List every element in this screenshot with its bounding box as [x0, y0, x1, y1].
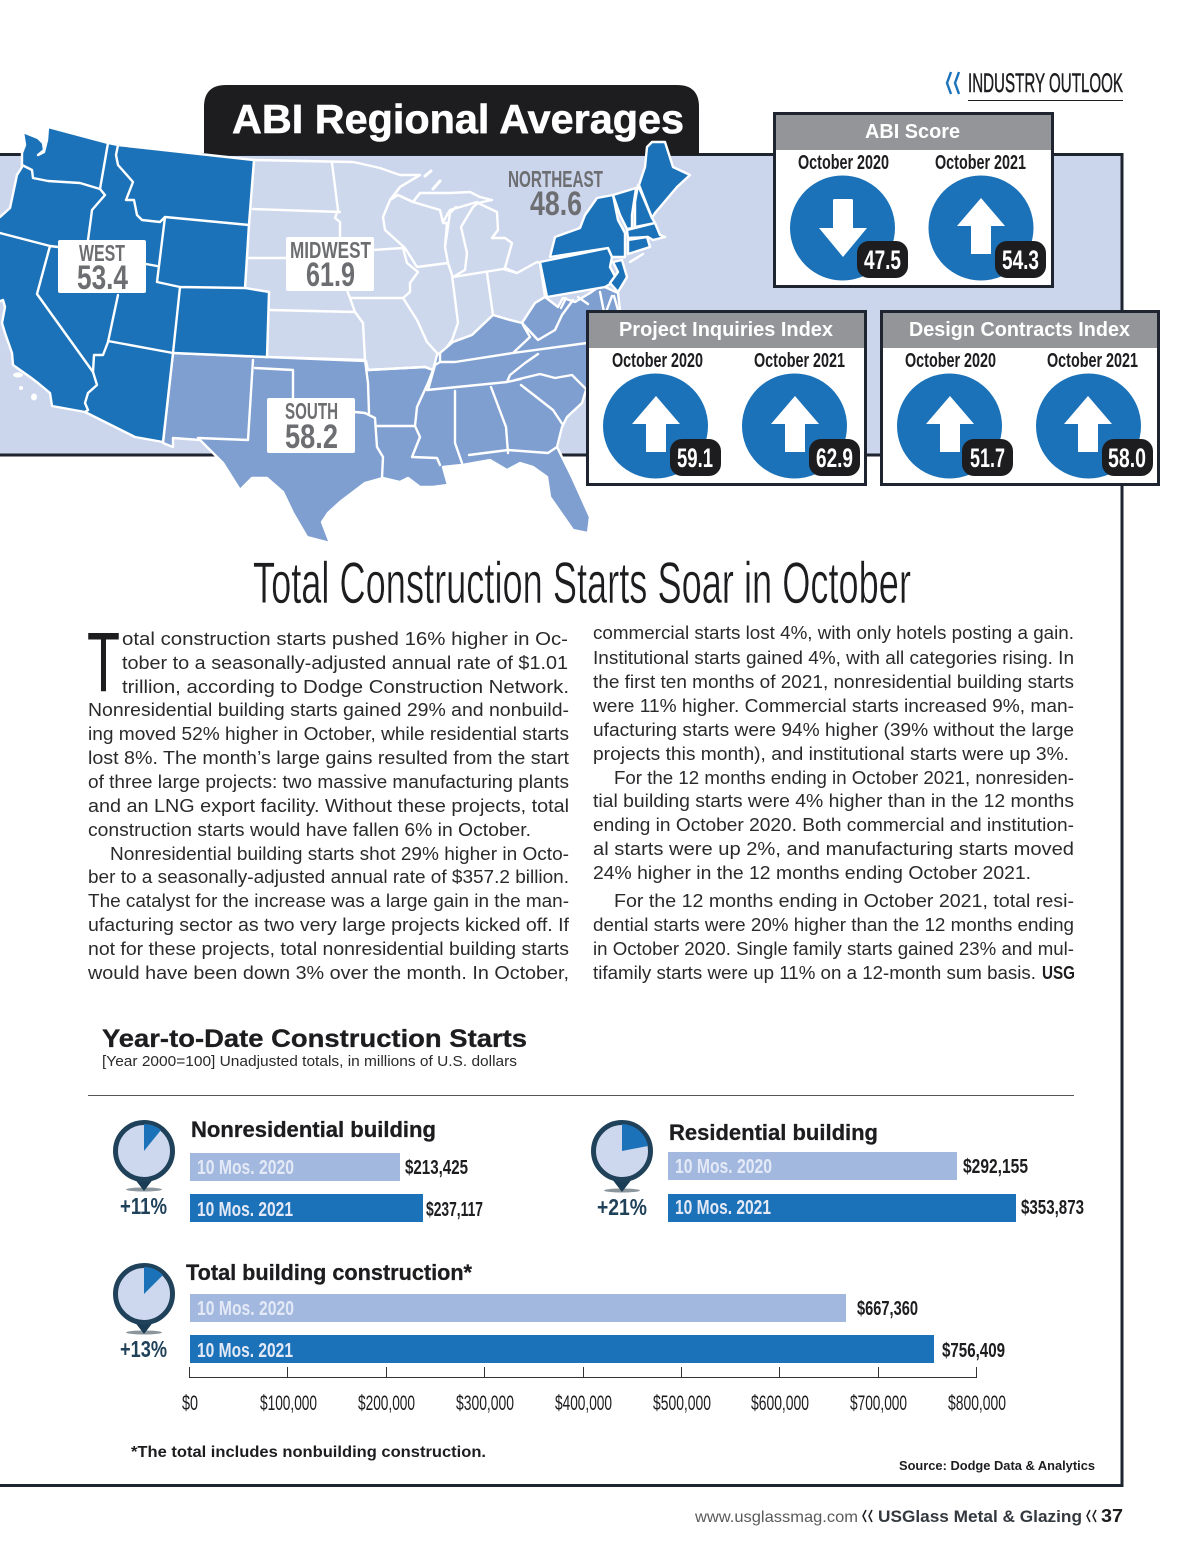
bar chart: nonresidential building: $213,425 [405, 1157, 468, 1179]
map label: Northeast: 48.6 [530, 185, 582, 223]
chart axis [182, 1367, 1006, 1415]
frame around article [0, 455, 1122, 1486]
footnote: *The total includes nonbuilding construction. [131, 1444, 486, 1461]
drop cap: T [87, 615, 120, 709]
US regional map [0, 127, 690, 543]
section header: industry outlook [947, 68, 1123, 101]
panel: ABI Score: October 2020 [798, 152, 889, 174]
chart axis: $700,000 [850, 1392, 907, 1415]
article text: left column: ufacturing sector as two very large projects kicked off. If [88, 915, 570, 935]
panel: ABI Score: October 2021 [935, 152, 1026, 174]
article text: right column: dential starts were 20% higher than the 12 months ending [593, 915, 1074, 935]
icon: pin gauge +13%: +13% [120, 1336, 167, 1362]
icon: pin gauge +11%: +11% [120, 1193, 167, 1219]
map label: Midwest: MIDWEST [290, 237, 371, 263]
article text: left column: construction starts would have fallen 6% in October. [88, 820, 531, 840]
bar chart: total building construction [116, 1260, 1005, 1363]
article text: left column: ing moved 52% higher in October, while residential starts [88, 724, 569, 744]
bar chart: nonresidential building: 10 Mos. 2020 [197, 1157, 294, 1179]
chart axis: $600,000 [751, 1392, 809, 1415]
article text: left column: of three large projects: two massive manufacturing plants [88, 772, 569, 792]
panel: Design Contracts Index: October 2021 [1047, 350, 1138, 372]
panel: Project Inquiries Index: October 2021 [754, 350, 845, 372]
icon: up arrow 59.1: 59.1 [677, 443, 713, 473]
panel: Design Contracts Index: October 2020 [905, 350, 996, 372]
panel: map background [0, 154, 1122, 455]
article text: right column: USG [1042, 962, 1075, 983]
chart axis: $800,000 [948, 1392, 1006, 1415]
chart axis: $100,000 [260, 1392, 317, 1415]
icon: up arrow 62.9 [742, 374, 860, 478]
article text: left column [87, 615, 570, 983]
bar chart: nonresidential building: 10 Mos. 2021 [197, 1199, 293, 1221]
article text: left column: Nonresidential building starts gained 29% and nonbuild- [88, 700, 569, 720]
article text: left column: ber to a seasonally-adjusted annual rate of $357.2 billion. [88, 867, 569, 887]
panel: Project Inquiries Index: Project Inquiries Index [619, 319, 833, 341]
heading tab: ABI Regional Averages [204, 85, 699, 155]
map label: West [58, 240, 146, 297]
northeast region [540, 142, 690, 297]
icon: up arrow 51.7: 51.7 [970, 443, 1005, 473]
article text: left column: The catalyst for the increase was a large gain in the man- [88, 891, 569, 911]
panel: ABI Score [774, 114, 1052, 286]
icon: up arrow 51.7 [897, 374, 1013, 478]
map label: South [267, 398, 355, 456]
map label: South: 58.2 [285, 418, 338, 456]
map label: Northeast: NORTHEAST [508, 166, 603, 192]
panel: Project Inquiries Index [588, 312, 866, 484]
west region [0, 127, 269, 442]
article text: left column: and an LNG export facility. Without these projects, total [88, 796, 569, 816]
midwest region [245, 160, 545, 370]
article text: left column: Nonresidential building starts shot 29% higher in Octo- [110, 844, 569, 864]
article text: right column: the first ten months of 2021, nonresidential building starts [593, 672, 1074, 692]
map label: West: 53.4 [77, 259, 128, 297]
bar chart: total building construction: $756,409 [942, 1340, 1005, 1362]
page footer: www.usglassmag.com [694, 1509, 858, 1526]
panel: Design Contracts Index [882, 312, 1158, 484]
bar chart: nonresidential building: $237,117 [426, 1199, 483, 1221]
article text: left column: trillion, according to Dodge Construction Network. [122, 677, 569, 697]
chart heading [88, 1025, 1074, 1096]
bar chart: residential building: $292,155 [963, 1156, 1028, 1178]
source note: Source: Dodge Data & Analytics [899, 1459, 1095, 1473]
article text: left column: tober to a seasonally-adjusted annual rate of $1.01 [122, 653, 568, 673]
bar chart: nonresidential building: Nonresidential building [191, 1117, 436, 1142]
bar chart: total building construction: 10 Mos. 2020 [197, 1298, 294, 1320]
panel: Project Inquiries Index: October 2020 [612, 350, 703, 372]
icon: pin gauge +21% [594, 1122, 650, 1220]
bar chart: total building construction: $667,360 [857, 1298, 918, 1320]
page footer [694, 1506, 1123, 1526]
map label: Northeast [508, 166, 603, 223]
article text: right column: in October 2020. Single family starts gained 23% and mul- [593, 939, 1074, 959]
icon: up arrow 54.3: 54.3 [1002, 245, 1039, 275]
article text: left column: otal construction starts pushed 16% higher in Oc- [122, 629, 568, 649]
bar chart: residential building: $353,873 [1021, 1197, 1084, 1219]
california islands [13, 372, 37, 400]
icon: up arrow 54.3 [928, 176, 1046, 280]
article text: right column: tial building starts were 4% higher than in the 12 months [593, 791, 1074, 811]
map label: West: WEST [79, 240, 125, 266]
article text: right column: projects this month), and institutional starts were up 3%. [593, 744, 1069, 764]
bar chart: total building construction: Total building construction* [186, 1260, 472, 1285]
article text: right column: al starts were up 2%, and manufacturing starts moved [593, 839, 1074, 859]
chart axis: $400,000 [555, 1392, 612, 1415]
article text: right column: ending in October 2020. Both commercial and institution- [593, 815, 1074, 835]
page footer: 37 [1101, 1506, 1123, 1526]
article text: right column: For the 12 months ending in October 2021, total resi- [614, 891, 1074, 911]
panel: ABI Score: ABI Score [865, 121, 960, 143]
article text: right column: ufacturing starts were 94% higher (39% without the large [593, 720, 1074, 740]
chart heading: [Year 2000=100] Unadjusted totals, in millions of U.S. dollars [102, 1053, 517, 1070]
article text: left column: not for these projects, total nonresidential building starts [88, 939, 569, 959]
icon: down arrow 47.5: 47.5 [864, 245, 901, 275]
article text: right column [592, 623, 1075, 983]
article text: left column: lost 8%. The month’s large gains resulted from the start [88, 748, 569, 768]
bar chart: residential building: Residential building [669, 1120, 878, 1145]
article text: right column: For the 12 months ending in October 2021, nonresiden- [614, 768, 1074, 788]
bar chart: residential building: 10 Mos. 2021 [675, 1197, 771, 1219]
map label: South: SOUTH [285, 398, 338, 424]
icon: down arrow 47.5 [790, 176, 908, 280]
icon: pin gauge +21%: +21% [597, 1194, 647, 1220]
chart axis: $500,000 [653, 1392, 711, 1415]
icon: up arrow 59.1 [603, 374, 721, 478]
chart axis: $300,000 [456, 1392, 514, 1415]
icon: up arrow 58.0: 58.0 [1108, 443, 1146, 473]
chart heading: Year-to-Date Construction Starts [102, 1025, 527, 1053]
south region [163, 287, 620, 543]
icon: up arrow 58.0 [1036, 374, 1153, 478]
panel: Design Contracts Index: Design Contracts Index [909, 319, 1130, 341]
map label: Midwest [286, 237, 374, 294]
icon: up arrow 62.9: 62.9 [816, 443, 853, 473]
chart axis: $0 [182, 1392, 198, 1415]
bar chart: residential building: 10 Mos. 2020 [675, 1156, 772, 1178]
article text: left column: would have been down 3% over the month. In October, [87, 963, 569, 983]
bar chart: residential building [594, 1120, 1084, 1222]
article text: right column: were 11% higher. Commercial starts increased 9%, man- [592, 696, 1074, 716]
article text: right column: 24% higher in the 12 months ending October 2021. [593, 863, 1031, 883]
article text: right column: Institutional starts gained 4%, with all categories rising. In [593, 648, 1074, 668]
icon: pin gauge +13% [116, 1266, 172, 1362]
bar chart: total building construction: 10 Mos. 2021 [197, 1340, 293, 1362]
heading tab: ABI Regional Averages: ABI Regional Averages [232, 96, 684, 142]
article text: right column: commercial starts lost 4%, with only hotels posting a gain. [593, 623, 1074, 643]
map label: Midwest: 61.9 [306, 256, 355, 294]
icon: pin gauge +11% [116, 1122, 172, 1219]
article text: right column: tifamily starts were up 11% on a 12-month sum basis. [593, 963, 1036, 983]
bar chart: nonresidential building [116, 1117, 483, 1222]
chart axis: $200,000 [358, 1392, 415, 1415]
page footer: USGlass Metal & Glazing [878, 1507, 1082, 1526]
